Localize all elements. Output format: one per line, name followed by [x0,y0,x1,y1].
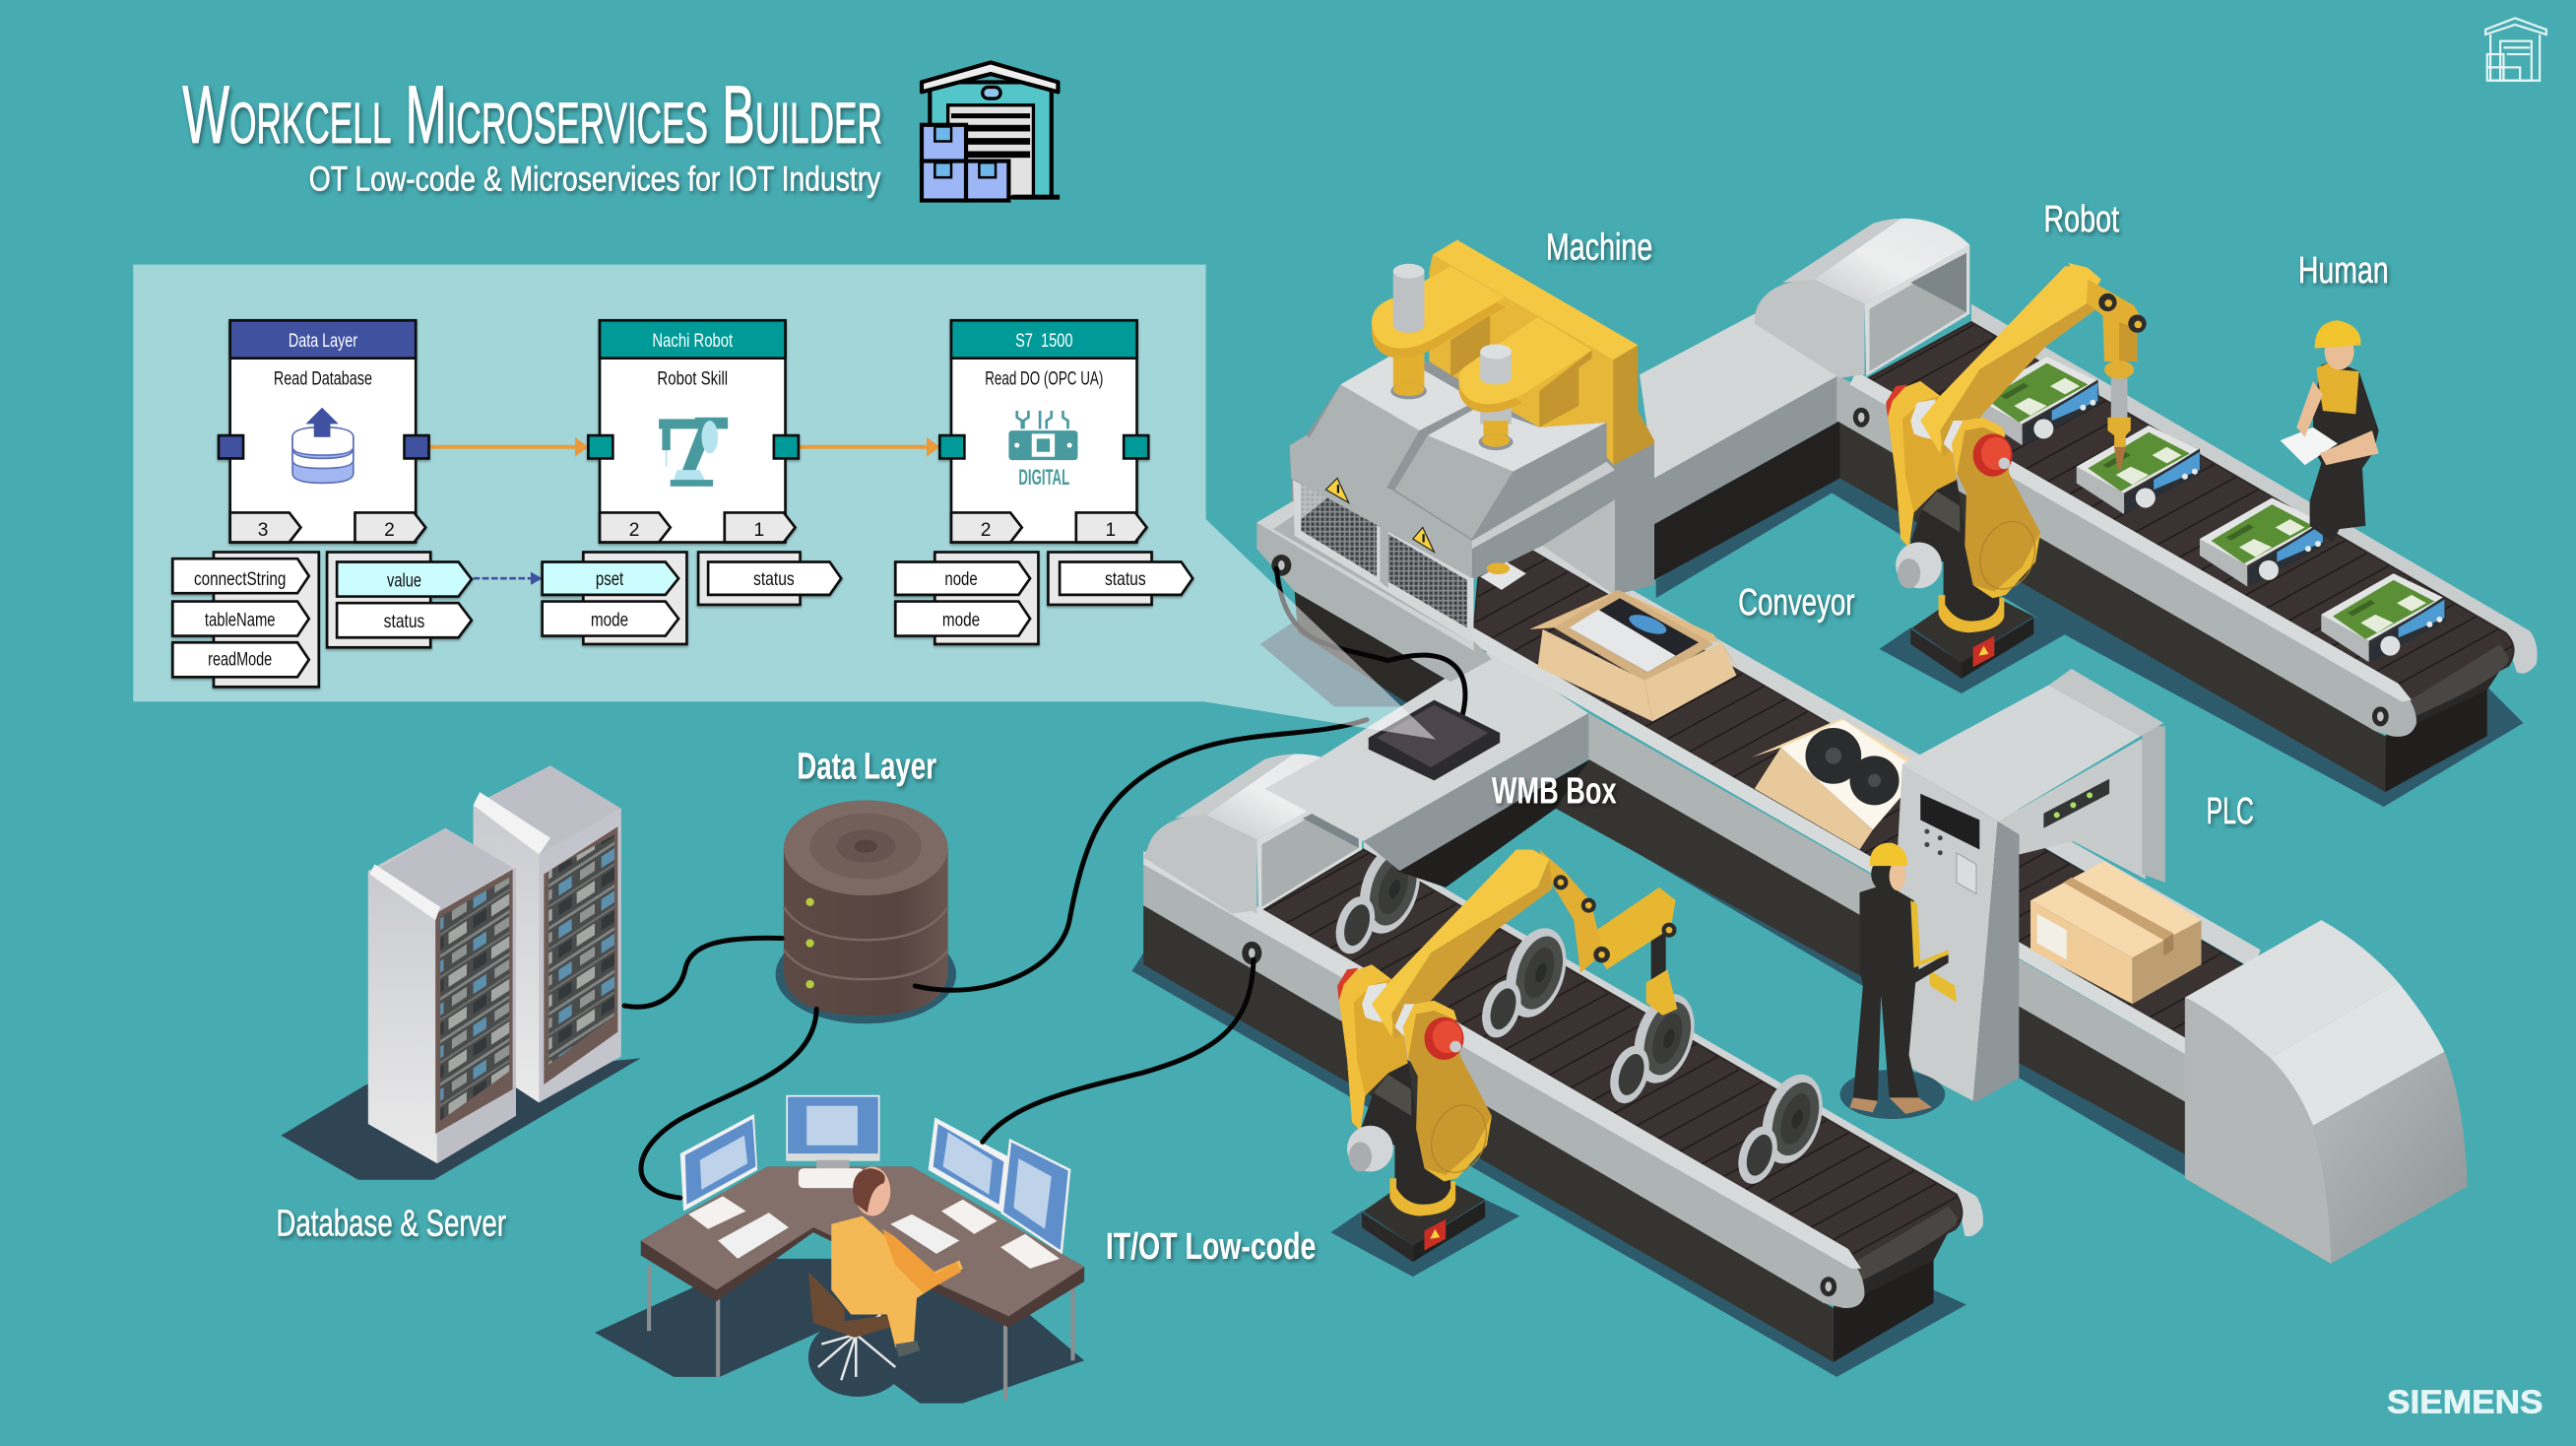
network cables [624,568,1465,1198]
title: Workcell Microservices Builder [182,69,882,161]
title: OT Low-code & Microservices for IOT Industry [309,161,881,199]
node: Data Layer: 3 [258,520,268,541]
arrow: value to pset [474,572,543,585]
ports: Data Layer outputs [327,553,472,647]
gauges on lower conveyor [1329,836,1834,1189]
label: Conveyor: Conveyor [1738,581,1855,624]
panel: workflow builder [133,265,1206,701]
computer monitors and keyboards [680,1096,1069,1269]
ports: Nachi Robot outputs: status [753,569,795,590]
callout beam to WMB box [1204,517,1436,740]
node: Nachi Robot: 1 [754,520,764,541]
worker at PLC [1840,843,1949,1119]
label: Machine: Machine [1546,227,1652,269]
ports: Nachi Robot outputs [698,553,841,605]
lower conveyor with housing [1132,755,1983,1377]
ports: S7 inputs: node [944,569,978,590]
node: Nachi Robot: Robot Skill [657,368,728,389]
ports: Data Layer inputs: connectString [194,569,286,590]
robot on lower conveyor [1330,849,1677,1277]
ports: Nachi Robot inputs: mode [591,611,628,631]
label: Database and Server: Database & Server [276,1202,506,1244]
icon: database with upload arrow [292,408,354,483]
operator in chair [808,1166,963,1397]
machine base and main conveyor [1260,534,2261,1176]
data layer cylinder [776,800,956,1023]
node: S7 1500: Read DO (OPC UA) [985,368,1103,389]
PLC control cabinet [1886,669,2165,1102]
robot on upper conveyor [1880,263,2147,693]
WMB box device [1369,700,1500,780]
end housing [2185,920,2468,1264]
ports: Data Layer outputs: status [384,612,424,632]
icon: warehouse title [922,62,1060,201]
ports: S7 inputs [895,553,1038,644]
icon: digital chip [1008,411,1077,490]
node: Data Layer: Data Layer [289,331,357,352]
label: WMB Box: WMB Box [1492,770,1617,813]
ports: Data Layer inputs [172,553,319,687]
label: Data Layer: Data Layer [797,746,936,788]
label: Robot: Robot [2043,198,2119,240]
arrow: orange flows [429,437,939,457]
label: Human: Human [2298,249,2389,292]
labels [276,198,2389,1268]
ports: Nachi Robot inputs [543,553,686,644]
node: Nachi Robot [588,320,799,542]
node: Data Layer [219,320,429,542]
node: S7 1500 [939,320,1148,542]
human inspector [2281,320,2379,542]
cartons on main conveyor [1529,590,2202,1004]
node: S7 1500: 2 [981,520,991,541]
ports: Data Layer outputs: value [387,571,421,592]
node: Data Layer: 2 [384,520,395,541]
title [182,69,882,199]
icon: robot arm [659,418,728,487]
icon: small warehouse corner [2485,18,2546,81]
node: S7 1500: S7 1500 [1015,331,1072,352]
node: Nachi Robot: 2 [629,520,639,541]
logo: Siemens: SIEMENS [2387,1385,2543,1421]
machine [1256,240,1654,682]
desk with shadow [595,1166,1084,1404]
node: Nachi Robot: Nachi Robot [652,331,734,352]
ports: Data Layer inputs: tableName [205,611,276,631]
ports: S7 outputs [1048,553,1192,605]
ports: Nachi Robot inputs: pset [596,569,624,590]
icon: digital chip: DIGITAL [1018,465,1069,490]
ports: S7 outputs: status [1105,569,1146,590]
ports: S7 inputs: mode [942,611,980,631]
label: IT/OT Low-code: IT/OT Low-code [1106,1225,1316,1268]
node: S7 1500: 1 [1106,520,1116,541]
upper conveyor with robot line [1640,219,2538,807]
node: Data Layer: Read Database [274,368,372,389]
ports: Data Layer inputs: readMode [208,650,272,671]
circuit boards on upper conveyor [1974,357,2446,662]
label: PLC: PLC [2207,790,2254,832]
server racks with shadow [281,765,641,1180]
